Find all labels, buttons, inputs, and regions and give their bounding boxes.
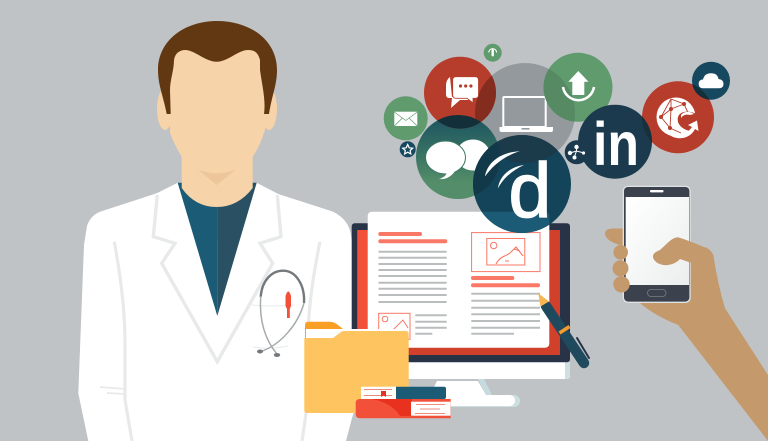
red screen dark layer: [357, 230, 560, 355]
icon: d logo signal arcs: [485, 151, 524, 188]
stethoscope: [257, 271, 304, 357]
overlap: d logo and group chat: [473, 142, 500, 196]
overlap: d logo and page: [482, 212, 550, 233]
pen nib: [538, 293, 549, 306]
top book pages: [361, 387, 396, 399]
large image placeholder: [472, 233, 540, 272]
icon: star: [403, 144, 413, 154]
small image placeholder: [379, 313, 410, 339]
right column text: [471, 294, 540, 334]
top book ribbon: [381, 391, 386, 397]
bubble: microphone: [484, 44, 502, 62]
overlap: message and laptop: [475, 76, 496, 124]
red pen in pocket: [286, 292, 291, 318]
overlap: d logo and laptop: [497, 135, 558, 163]
pen body: [546, 306, 584, 363]
smartphone: [623, 186, 691, 303]
face: [170, 45, 265, 173]
bottom book cover: [356, 399, 451, 418]
bubble: star: [400, 141, 416, 157]
left column text: [378, 252, 447, 334]
folder tab: [305, 322, 408, 340]
icon: microphone: [489, 49, 497, 56]
folder: [304, 322, 409, 413]
open document page: [368, 212, 549, 348]
folder paper: [306, 329, 408, 340]
bubble: d logo: [473, 135, 571, 233]
overlap: globe and cloud: [692, 84, 710, 100]
coat creases: [100, 242, 320, 441]
pen: [538, 293, 589, 363]
bubble: message: [424, 57, 496, 129]
right column heading: [471, 276, 540, 287]
pen ring: [560, 326, 570, 333]
arm and palm: [640, 238, 768, 441]
bottom book text: [415, 404, 445, 414]
monitor frame: [352, 223, 570, 362]
undershirt: [178, 183, 257, 316]
icon: share nodes: [568, 145, 585, 160]
bubble cluster: [384, 44, 730, 234]
hand holding phone: [605, 186, 768, 441]
neck shadow: [182, 156, 253, 185]
monitor base top: [440, 395, 515, 406]
bubble: globe: [642, 81, 714, 153]
overlap: upload and laptop: [544, 69, 575, 122]
left column heading: [378, 232, 447, 243]
icon: cloud: [699, 73, 724, 88]
linkedin letters: in: [593, 110, 639, 178]
icon: laptop: [500, 97, 553, 132]
red screen bright strip: [357, 230, 377, 348]
bubble: share: [565, 140, 589, 164]
overlap: message and group chat: [437, 115, 481, 129]
doctor figure: [78, 21, 360, 441]
monitor chin shading: [565, 362, 570, 379]
top book spine: [395, 387, 446, 399]
index finger: [605, 228, 625, 245]
bottom book pages: [411, 402, 450, 416]
coat lapels: [153, 195, 281, 362]
icon: upload arrow: [563, 71, 594, 100]
bubble: laptop: [475, 63, 575, 163]
monitor stand shadow: [478, 379, 492, 395]
fingers: [612, 245, 630, 292]
overlap: linkedin and globe: [642, 116, 652, 142]
bottom book shade: [372, 399, 412, 416]
icon: message bubbles: [446, 77, 478, 108]
monitor stand: [430, 381, 486, 395]
neck: [182, 150, 253, 207]
thumb: [653, 237, 713, 265]
bubble: mail: [384, 96, 428, 140]
phone speaker: [650, 190, 664, 192]
bubble: upload: [544, 53, 612, 122]
hair: [158, 21, 277, 114]
icon: group chat bubbles: [426, 140, 490, 179]
pen clip: [577, 338, 589, 358]
bubble: cloud: [692, 62, 730, 100]
icon: envelope: [394, 112, 417, 126]
icon: globe: [656, 98, 698, 138]
phone screen: [626, 197, 689, 285]
stack of books: [356, 387, 451, 418]
monitor: [352, 212, 570, 407]
top book text: [364, 390, 392, 396]
ears: [157, 88, 277, 130]
monitor base: [440, 395, 520, 407]
bubble: linkedin: [578, 105, 652, 179]
lab coat: [78, 183, 360, 441]
logo letter d: d: [508, 148, 551, 234]
folder front: [304, 331, 409, 413]
bubble: group chat: [416, 115, 500, 199]
monitor chin: [408, 362, 570, 379]
phone home button: [648, 290, 666, 296]
